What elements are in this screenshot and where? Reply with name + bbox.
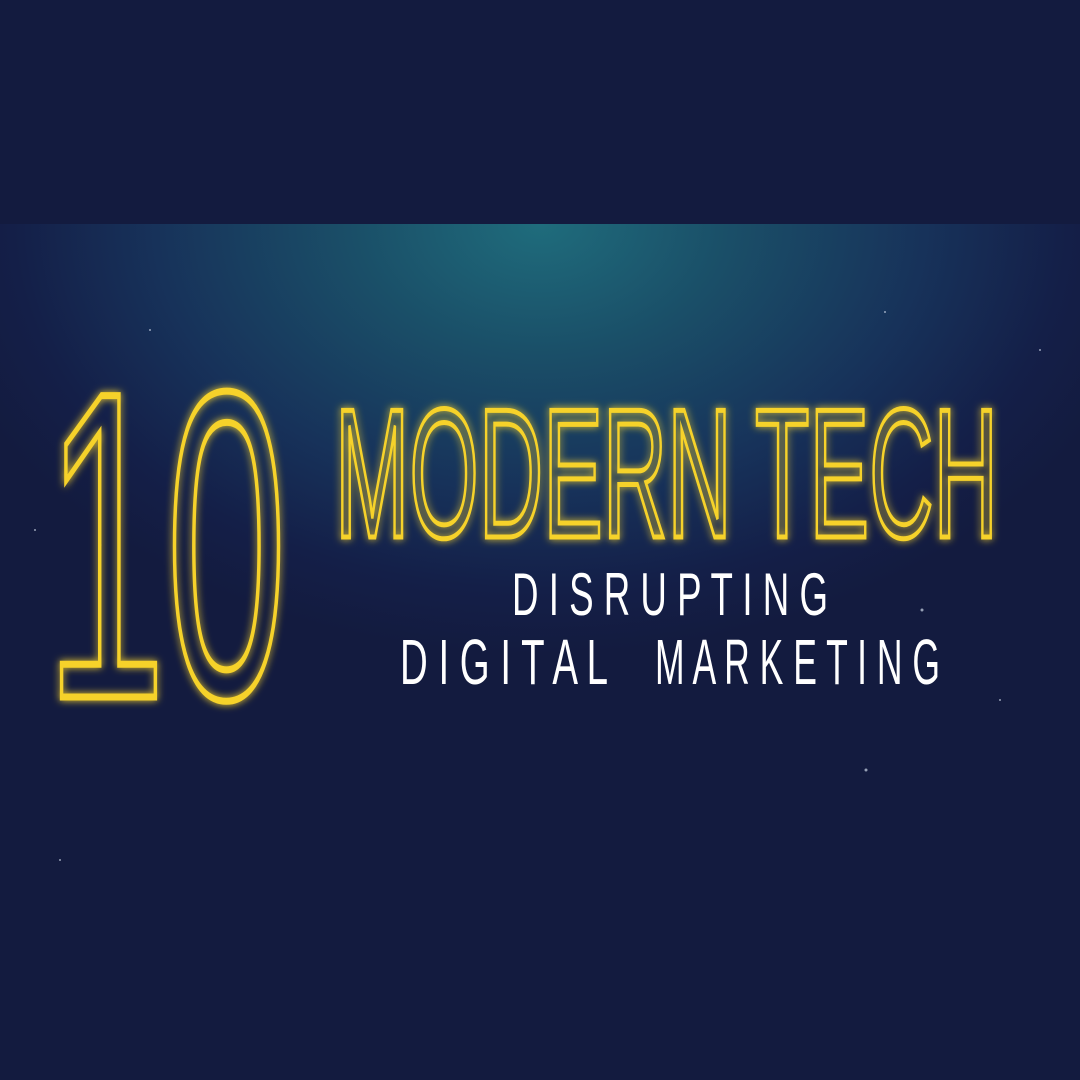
- subtitle: D I S R U P T I N G: [512, 561, 828, 628]
- stars: [34, 311, 1041, 861]
- text: 10: [45, 300, 287, 790]
- subtitle: D I G I T A L: [400, 626, 608, 698]
- subtitle: [400, 561, 940, 698]
